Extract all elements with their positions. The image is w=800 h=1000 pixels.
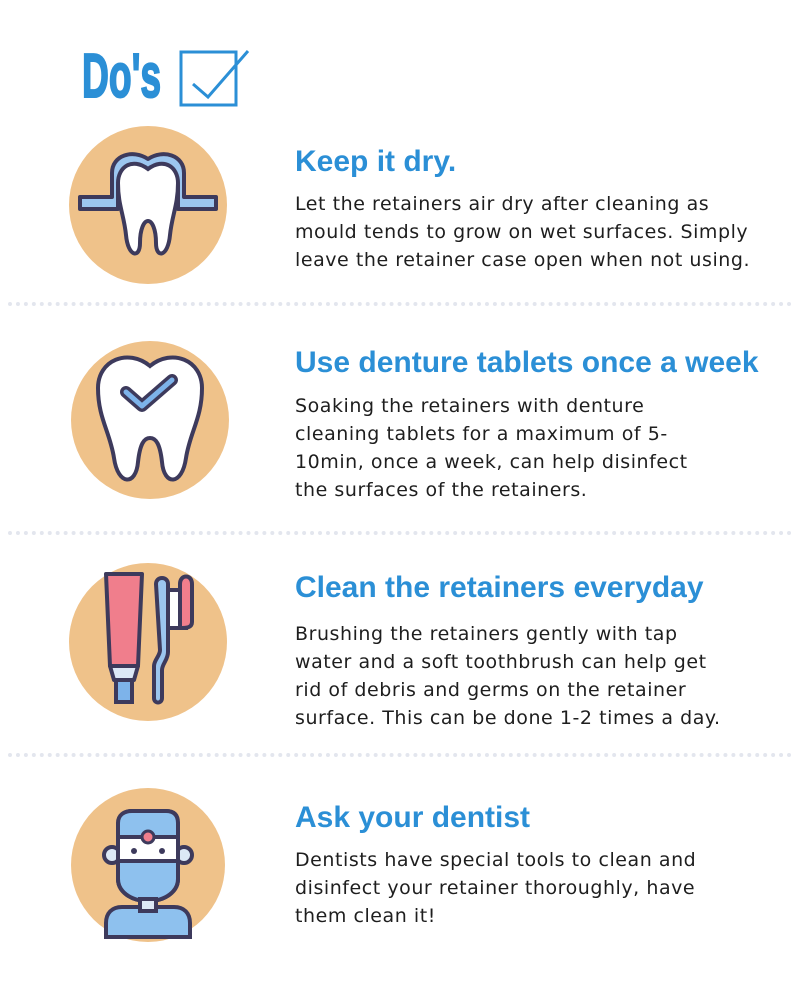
icon: checkbox: [180, 50, 249, 106]
text 4: Dentists have special tools to clean and: [295, 849, 696, 871]
text 2: cleaning tablets for a maximum of 5-: [295, 423, 668, 445]
text 2: Soaking the retainers with denture: [295, 395, 644, 417]
text 2: [295, 395, 688, 501]
text 3: rid of debris and germs on the retainer: [295, 679, 686, 701]
text 2: the surfaces of the retainers.: [295, 479, 587, 501]
text 4: disinfect your retainer thoroughly, have: [295, 877, 695, 899]
heading 1: Keep it dry.: [295, 145, 456, 178]
icon: toothpaste and toothbrush: [69, 563, 227, 721]
title: Do's: [82, 42, 161, 111]
text 3: surface. This can be done 1-2 times a day.: [295, 707, 721, 729]
icon: tooth with check: [71, 341, 229, 499]
text 1: leave the retainer case open when not using.: [295, 249, 750, 271]
text 4: them clean it!: [295, 905, 436, 927]
text 1: Let the retainers air dry after cleaning as: [295, 193, 709, 215]
heading 3: Clean the retainers everyday: [295, 571, 704, 604]
text 4: [295, 849, 696, 927]
text 3: water and a soft toothbrush can help get: [295, 651, 707, 673]
title: [82, 42, 249, 111]
text 3: [295, 623, 721, 729]
icon: dentist: [71, 788, 225, 942]
text 3: Brushing the retainers gently with tap: [295, 623, 678, 645]
heading 4: Ask your dentist: [295, 801, 530, 834]
text 1: [295, 193, 750, 271]
text 2: 10min, once a week, can help disinfect: [295, 451, 688, 473]
icon: tooth with retainer: [69, 126, 227, 284]
heading 2: Use denture tablets once a week: [295, 346, 759, 379]
text 1: mould tends to grow on wet surfaces. Simply: [295, 221, 748, 243]
